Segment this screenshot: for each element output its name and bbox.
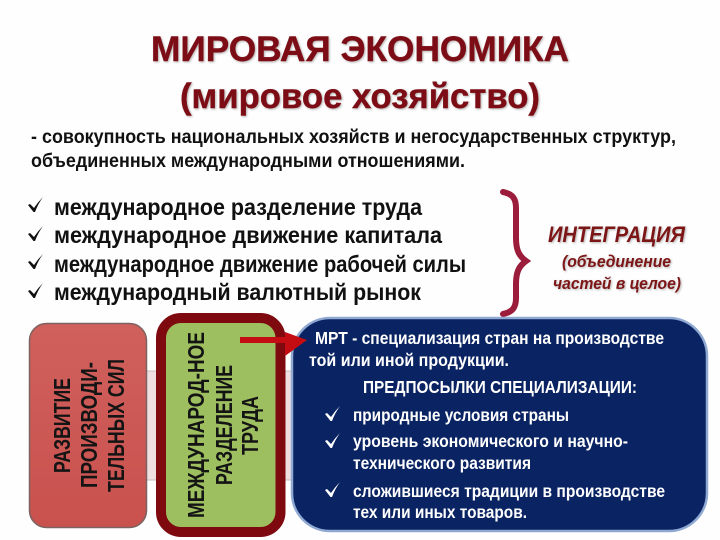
checklist: международное разделение труда: [54, 194, 422, 220]
panel: specialisation: тех или иных товаров.: [353, 502, 527, 522]
title: МИРОВАЯ ЭКОНОМИКА: [151, 30, 569, 69]
panel: specialisation: технического развития: [353, 453, 531, 473]
checklist: [28, 194, 466, 305]
arrow: [240, 332, 307, 356]
icons: white checkmarks: [325, 406, 340, 497]
panel: international division of labour: МЕЖДУНАРОД-НОЕ: [183, 332, 209, 518]
checklist: международный валютный рынок: [54, 279, 421, 305]
definition text: [31, 126, 676, 172]
panel: productive forces: РАЗВИТИЕ: [49, 378, 75, 473]
panel: international division of labour: ТРУДА: [237, 396, 263, 455]
integration label: ИНТЕГРАЦИЯ: [548, 222, 686, 247]
integration label: частей в целое): [553, 275, 681, 293]
panel: international division of labour: РАЗДЕЛЕНИЕ: [211, 365, 237, 485]
checklist: международное движение капитала: [54, 222, 442, 248]
icons: checkmarks: [28, 197, 43, 298]
panel: specialisation: уровень экономического и научно-: [353, 431, 628, 451]
panel: specialisation: природные условия страны: [353, 405, 569, 425]
connector band: [146, 371, 292, 480]
panel: specialisation: ПРЕДПОСЫЛКИ СПЕЦИАЛИЗАЦИИ:: [363, 377, 637, 397]
integration label: (объединение: [562, 253, 671, 271]
panel: specialisation: [292, 318, 707, 531]
panel: international division of labour: [161, 318, 280, 532]
panel: specialisation: сложившиеся традиции в производстве: [353, 481, 665, 501]
integration label: [548, 222, 686, 293]
panel: productive forces: [30, 324, 146, 528]
definition text: объединенных международными отношениями.: [31, 150, 465, 172]
title: [151, 30, 569, 116]
panel: specialisation: МРТ - специализация стран на производстве: [315, 328, 664, 348]
definition text: - совокупность национальных хозяйств и негосударственных структур,: [31, 126, 676, 148]
panel: productive forces: ПРОИЗВОДИ-: [76, 362, 102, 488]
checklist: международное движение рабочей силы: [54, 251, 466, 277]
panel: productive forces: ТЕЛЬНЫХ СИЛ: [103, 359, 129, 492]
panel: specialisation: той или иной продукции.: [309, 350, 509, 370]
icon: curly bracket: [503, 192, 526, 314]
title: (мировое хозяйство): [180, 77, 540, 116]
